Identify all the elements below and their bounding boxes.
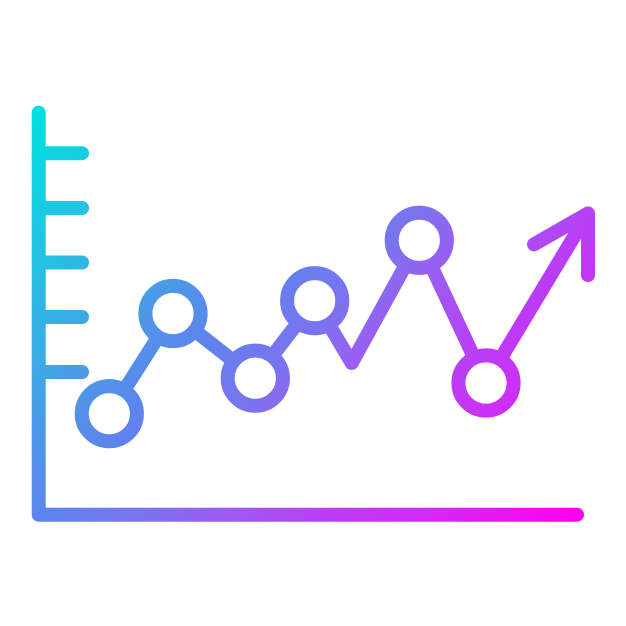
data point 6	[458, 355, 514, 411]
data point 3	[228, 351, 283, 406]
arrow head	[534, 214, 588, 275]
data point 1	[82, 386, 137, 441]
trend line connectors	[109, 214, 588, 414]
axis tick marks	[39, 153, 82, 372]
data point 4	[287, 273, 342, 328]
data point 5	[392, 213, 447, 268]
chart axes	[39, 113, 577, 515]
data point 2	[145, 286, 201, 341]
